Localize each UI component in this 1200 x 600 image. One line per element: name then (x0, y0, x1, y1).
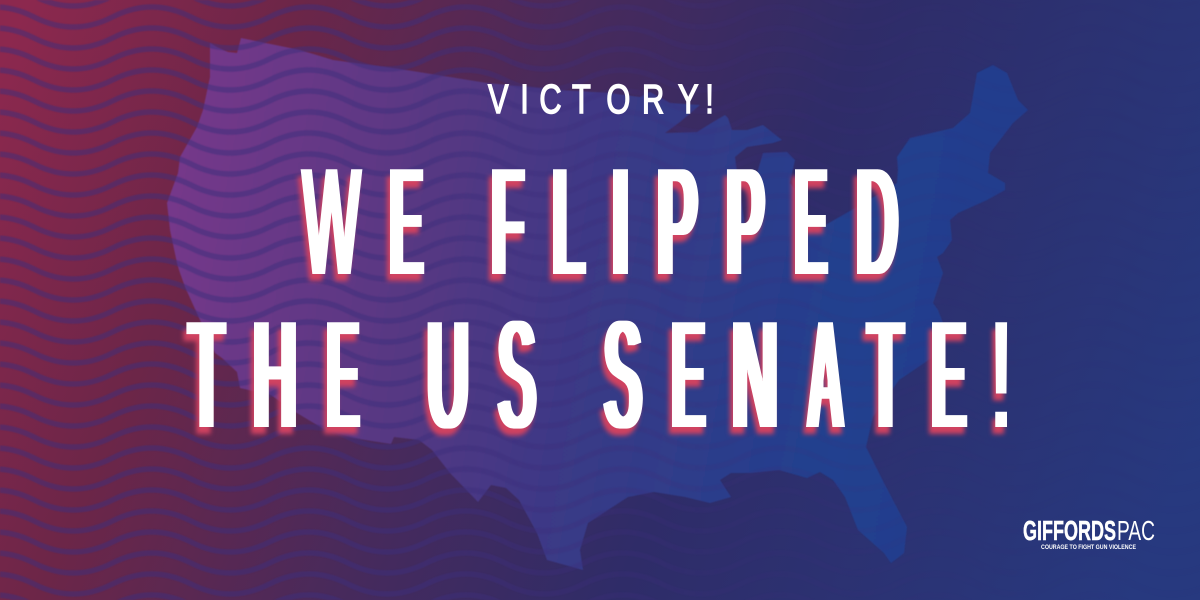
headline line 2: THE US SENATE!: E (672, 286, 705, 465)
headline line 2: THE US SENATE!: S (498, 285, 536, 465)
headline line 2: THE US SENATE!: H (253, 285, 297, 464)
headline line 2: THE US SENATE!: ! (994, 285, 1008, 464)
logo: Giffords PAC: PAC (1117, 515, 1155, 546)
headline line 1: WE FLIPPED: L (552, 132, 585, 312)
wave line pattern (0, 0, 629, 600)
headline line 2: THE US SENATE!: E (327, 285, 359, 465)
headline line 1: WE FLIPPED: I (612, 131, 629, 311)
logo: Giffords PAC: COURAGE TO FIGHT GUN VIOLENCE (1041, 544, 1136, 551)
headline line 2: THE US SENATE!: N (732, 284, 778, 464)
headline line 2: THE US SENATE!: U (427, 284, 469, 465)
headline line 1: WE FLIPPED: P (657, 132, 698, 311)
headline line 1: WE FLIPPED (303, 131, 898, 312)
logo: Giffords PAC: GIFFORDS (1023, 515, 1116, 546)
kicker: VICTORY!: VICTORY! (488, 76, 714, 122)
headline line 1: WE FLIPPED: E (390, 133, 423, 312)
map of the United States (167, 38, 1028, 570)
headline line 2: THE US SENATE!: S (604, 285, 642, 465)
headline line 1: WE FLIPPED: W (303, 132, 360, 311)
headline line 2: THE US SENATE!: T (868, 284, 903, 465)
headline line 1: WE FLIPPED: D (856, 131, 898, 312)
headline line 1: WE FLIPPED: P (726, 132, 765, 312)
headline line 2: THE US SENATE! (189, 284, 1008, 465)
headline line 1: WE FLIPPED: F (491, 132, 524, 312)
headline line 2: THE US SENATE!: E (932, 286, 966, 465)
headline line 2: THE US SENATE!: A (807, 286, 844, 465)
headline line 1: WE FLIPPED: E (795, 132, 827, 312)
headline line 2: THE US SENATE!: T (189, 284, 224, 465)
